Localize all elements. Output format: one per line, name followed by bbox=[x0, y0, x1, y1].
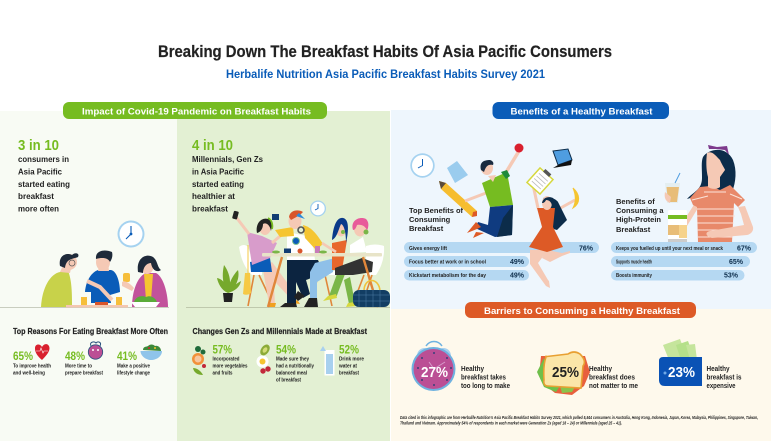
text block: 3 in 10: started eating bbox=[18, 179, 70, 189]
barrier: 27% too long: too long to make bbox=[461, 381, 510, 390]
text block: 4 in 10: in Asia Pacific bbox=[192, 166, 244, 176]
bars: high-protein benefits: 67% bbox=[737, 246, 752, 252]
stat: 52%: 52% bbox=[339, 344, 359, 356]
stat: 52% bbox=[338, 344, 364, 377]
stat: 52%: Drink more bbox=[339, 357, 364, 363]
stat: 41% bbox=[117, 351, 150, 376]
icon: clock bbox=[410, 153, 435, 178]
panel: 3 in 10 consumers bbox=[0, 111, 177, 441]
heading: top reasons: Top Reasons For Eating Breakfast More Often bbox=[13, 326, 168, 336]
barrier: 27% too long bbox=[412, 342, 510, 391]
barrier: 27% too long: breakfast takes bbox=[461, 372, 506, 382]
bars: high-protein benefits: Boosts immunity bbox=[616, 273, 652, 279]
icon: book bbox=[447, 161, 468, 183]
icon: banana bbox=[573, 188, 579, 208]
stat: 48%: More time to bbox=[65, 364, 92, 370]
stat: 54%: 54% bbox=[276, 344, 296, 356]
stat: 48%: prepare breakfast bbox=[65, 370, 103, 376]
shake cup bbox=[665, 173, 680, 203]
bars: high-protein benefits: 53% bbox=[724, 272, 739, 280]
shake canister bbox=[668, 210, 687, 242]
footnote bbox=[400, 415, 758, 426]
bars: high-protein benefits: Supports muscle health bbox=[616, 260, 652, 266]
icon: purple clock bbox=[412, 342, 456, 391]
person: selfie with pink shirt bbox=[232, 211, 300, 307]
barrier: 25% does not matter: not matter to me bbox=[589, 381, 638, 390]
stat: 54% bbox=[276, 344, 314, 384]
text block: 3 in 10: 3 in 10 bbox=[18, 138, 59, 154]
person: pink cardigan bbox=[122, 256, 168, 307]
barrier: 27% too long: 27% bbox=[421, 364, 448, 381]
heading: covid impact bbox=[63, 102, 327, 119]
bars: top benefits bbox=[404, 242, 599, 280]
shirt bbox=[690, 185, 745, 242]
bars: high-protein benefits: Keeps you fuelled up until your next meal or snack bbox=[616, 246, 723, 252]
barrier: 25% does not matter: Healthy bbox=[589, 364, 613, 373]
panel: benefits of a healthy breakfast bbox=[391, 110, 771, 309]
stat: 54%: Made sure they bbox=[276, 357, 309, 363]
text block: 3 in 10: consumers in bbox=[18, 154, 69, 164]
text block: 3 in 10 bbox=[18, 138, 70, 214]
heading: changes: Changes Gen Zs and Millennials Made at Breakfast bbox=[192, 326, 367, 336]
icon: glass of water bbox=[320, 346, 334, 376]
text block: 4 in 10: healthier at bbox=[192, 191, 235, 201]
heading: benefits bbox=[492, 102, 669, 119]
text block: 4 in 10: breakfast bbox=[192, 204, 228, 214]
heading: benefits: Benefits of a Healthy Breakfast bbox=[510, 106, 653, 118]
yellow tote bag bbox=[243, 245, 251, 295]
stat: 54%: balanced meal bbox=[276, 371, 307, 377]
barrier: 25% does not matter: 25% bbox=[552, 364, 579, 381]
bars: high-protein benefits bbox=[611, 242, 757, 280]
illustration: friends at breakfast table bbox=[0, 220, 169, 308]
illustration: woman with shake bbox=[665, 145, 753, 242]
hair bbox=[687, 150, 736, 199]
barrier: 27% too long: Healthy bbox=[461, 364, 485, 373]
icon: vegetables and fruits bbox=[192, 346, 206, 375]
text: high-protein heading: High-Protein bbox=[616, 215, 661, 224]
text block: 4 in 10: started eating bbox=[192, 179, 244, 189]
stat: 65%: and well-being bbox=[13, 370, 45, 376]
icon: sandwich bbox=[537, 352, 590, 395]
text: high-protein heading: Consuming a bbox=[616, 206, 664, 215]
subtitle: Herbalife Nutrition Asia Pacific Breakfast Habits Survey 2021 bbox=[226, 69, 546, 81]
icon: clipboard bbox=[526, 165, 555, 195]
text: high-protein heading: Breakfast bbox=[616, 225, 651, 234]
blue plaid bag bbox=[353, 280, 390, 307]
heading: barriers bbox=[465, 302, 696, 318]
stat: 65%: 65% bbox=[13, 351, 33, 363]
barrier: 25% does not matter bbox=[537, 352, 638, 395]
bars: high-protein benefits: 65% bbox=[729, 259, 744, 266]
stat: 57%: 57% bbox=[212, 344, 232, 356]
stat: 41%: lifestyle change bbox=[117, 370, 150, 376]
text: high-protein heading: Benefits of bbox=[616, 197, 655, 206]
text: top benefits heading: Breakfast bbox=[409, 224, 444, 233]
person: blue shirt bbox=[85, 250, 120, 303]
icon: alarm clock bbox=[88, 342, 103, 359]
icon: avocado egg tomato bbox=[256, 343, 272, 374]
barrier: 23% expensive: breakfast is bbox=[706, 372, 742, 382]
barrier: 23% expensive bbox=[659, 339, 742, 390]
stat: 65%: To improve health bbox=[13, 364, 51, 370]
text block: 4 in 10 bbox=[192, 138, 263, 214]
text block: 3 in 10: breakfast bbox=[18, 191, 54, 201]
heading: covid impact: Impact of Covid-19 Pandemic on Breakfast Habits bbox=[82, 106, 311, 118]
illustration: millennials and gen z at table bbox=[186, 200, 390, 308]
left arm bbox=[683, 203, 698, 226]
bars: top benefits: 49% bbox=[510, 272, 525, 280]
stat: 52%: breakfast bbox=[339, 371, 359, 377]
stat: 57%: and fruits bbox=[212, 371, 233, 377]
stat: 41%: 41% bbox=[117, 351, 137, 363]
bars: top benefits: Focus better at work or in school bbox=[409, 260, 486, 266]
barrier: 23% expensive: Healthy bbox=[706, 364, 730, 373]
text: top benefits heading: Consuming bbox=[409, 215, 451, 224]
barrier: 23% expensive: 23% bbox=[668, 364, 695, 381]
illustration: jumping man bbox=[410, 144, 524, 238]
icon: laptop bbox=[553, 149, 572, 168]
icon: clock bbox=[118, 220, 144, 248]
stat: 57%: Incorporated bbox=[212, 357, 240, 363]
title: Breaking Down The Breakfast Habits Of Asia Pacific Consumers bbox=[158, 43, 612, 61]
barrier: 23% expensive: expensive bbox=[706, 381, 736, 390]
text block: 4 in 10: Millennials, Gen Zs bbox=[192, 154, 263, 164]
stat: 52%: water at bbox=[338, 364, 357, 370]
bars: top benefits: Gives energy lift bbox=[409, 246, 447, 252]
bars: top benefits: Kickstart metabolism for the day bbox=[409, 273, 486, 279]
footnote: Thailand and Vietnam. Approximately 54% of respondents in each market were Generation Zs (aged 18 – 24) or Millennials (aged 25 – 41). bbox=[400, 420, 622, 426]
text block: 4 in 10: 4 in 10 bbox=[192, 138, 233, 154]
stat: 41%: Make a positive bbox=[117, 364, 150, 370]
plant bbox=[217, 265, 241, 302]
text: top benefits heading: Top Benefits of bbox=[409, 206, 464, 215]
stat: 48%: 48% bbox=[65, 351, 85, 363]
stat: 48% bbox=[65, 351, 103, 376]
bars: top benefits: 76% bbox=[579, 246, 594, 252]
person: pink hair bbox=[323, 218, 373, 307]
person: green shirt bbox=[41, 253, 78, 307]
table bbox=[262, 246, 382, 307]
text block: 3 in 10: Asia Pacific bbox=[18, 166, 62, 176]
illustration: jumping woman bbox=[526, 165, 579, 288]
stat: 57%: more vegetables bbox=[212, 364, 248, 370]
panel: 4 in 10 millennials bbox=[177, 111, 390, 441]
heading: barriers: Barriers to Consuming a Healthy Breakfast bbox=[484, 306, 681, 317]
stat: 57% bbox=[212, 344, 248, 377]
icon: salad bowl bbox=[140, 344, 162, 360]
text block: 3 in 10: more often bbox=[18, 204, 59, 214]
icon: heart bbox=[35, 344, 50, 360]
bars: top benefits: 49% bbox=[510, 259, 525, 266]
barrier: 25% does not matter: breakfast does bbox=[589, 372, 635, 382]
icon: pencil bbox=[439, 181, 477, 217]
person: yellow sleeves with cap bbox=[272, 210, 323, 307]
stat: 65% bbox=[13, 351, 51, 376]
stat: 54%: of breakfast bbox=[276, 378, 301, 384]
stat: 54%: had a nutritionally bbox=[276, 364, 314, 370]
icon: small clock bbox=[310, 200, 326, 216]
icon: wallet with money bbox=[659, 339, 702, 386]
person: blue hair bbox=[304, 218, 348, 307]
chairs bbox=[239, 244, 384, 306]
food on table bbox=[66, 296, 160, 308]
panel: barriers bbox=[391, 309, 771, 441]
sunglasses bbox=[708, 145, 729, 155]
